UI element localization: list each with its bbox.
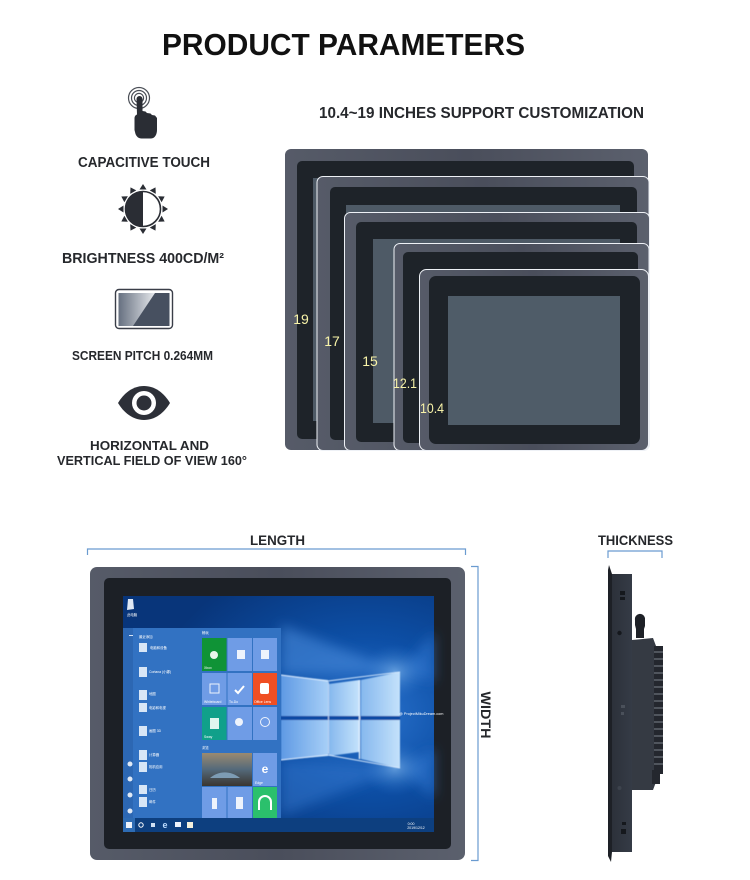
monitor: 15 inch: 15: [362, 353, 378, 369]
monitor bezel: [90, 567, 465, 860]
app list: 最近添加: [139, 634, 153, 639]
label: field of view: [57, 438, 247, 468]
taskbar: 2019/12/12: [407, 826, 425, 830]
panel: side view monitor: [608, 565, 663, 862]
tiles: To-Do: [229, 700, 238, 704]
app list: 计算器: [149, 752, 160, 757]
taskbar: 0:00: [408, 822, 414, 826]
monitor inner frame: [104, 578, 451, 849]
dimension: length: LENGTH: [250, 532, 305, 548]
taskbar: [123, 818, 434, 832]
tiles: 浏览: [202, 745, 209, 750]
label: screen pitch: SCREEN PITCH 0.264MM: [72, 348, 213, 363]
side ports: [617, 591, 626, 834]
monitor: 19 inch: 19: [293, 311, 309, 327]
panel: stacked monitor sizes: [285, 149, 650, 450]
app list: Cortana (小娜): [149, 669, 171, 674]
app list: 画图 3D: [149, 728, 162, 733]
tiles: Sway: [204, 735, 213, 739]
side mounting knob: [635, 614, 645, 638]
app list: 邮件: [149, 799, 156, 804]
desktop icon: [127, 599, 138, 617]
side rear housing: [632, 638, 656, 790]
screen: windows wallpaper: @ ProjectMikuDream.com: [399, 712, 443, 716]
side body: [612, 574, 632, 852]
app list: 日历: [149, 788, 156, 792]
taskbar: e: [162, 820, 168, 830]
dimension: width: [471, 566, 494, 860]
heading: size customization: 10.4~19 INCHES SUPPORT CUSTOMIZATION: [319, 105, 644, 122]
tiles: [202, 630, 277, 818]
side front bezel: [608, 565, 612, 862]
tiles: Edge: [255, 781, 263, 785]
app list: 电影和电视: [149, 705, 167, 710]
monitor: 12.1 inch: [393, 244, 649, 450]
dimension: thickness: [598, 532, 673, 558]
title: PRODUCT PARAMETERS: [162, 27, 525, 62]
start menu: [123, 628, 281, 818]
screen: windows wallpaper: [123, 596, 443, 832]
icon: screen pitch: [116, 290, 172, 328]
tiles: Xbox: [204, 666, 212, 670]
app list: 相机应用: [149, 764, 163, 769]
side cooling fins: [652, 646, 663, 784]
tiles: 畅玩: [202, 630, 209, 635]
label: field of view: HORIZONTAL AND: [90, 438, 209, 453]
app list: [128, 634, 171, 814]
monitor: 10.4 inch: [420, 270, 648, 450]
dimension: width: WIDTH: [478, 692, 494, 738]
label: capacitive touch: CAPACITIVE TOUCH: [78, 155, 210, 171]
panel: front view monitor: [90, 567, 465, 860]
app list: 地图: [149, 691, 156, 696]
app list: 电脑和设备: [150, 645, 168, 650]
monitor: 12.1 inch: 12.1: [393, 375, 417, 391]
tiles: Office Lens: [254, 700, 271, 704]
monitor: 19 inch: [285, 149, 648, 450]
tiles: e: [262, 762, 269, 776]
label: field of view: VERTICAL FIELD OF VIEW 160°: [57, 453, 247, 468]
monitor: 17 inch: [317, 176, 649, 450]
icon: eye: [118, 386, 170, 420]
icon: capacitive touch hand: [128, 88, 157, 138]
label: brightness: BRIGHTNESS 400CD/M²: [62, 251, 224, 267]
dimension: thickness: THICKNESS: [598, 532, 673, 548]
tiles: Whiteboard: [204, 700, 221, 704]
monitor: 15 inch: [344, 212, 650, 450]
monitor: 10.4 inch: 10.4: [420, 400, 444, 416]
desktop icon: 此电脑: [127, 612, 138, 617]
dimension: length: [88, 532, 466, 555]
icon: brightness sun: [118, 184, 168, 234]
monitor: 17 inch: 17: [324, 333, 340, 349]
